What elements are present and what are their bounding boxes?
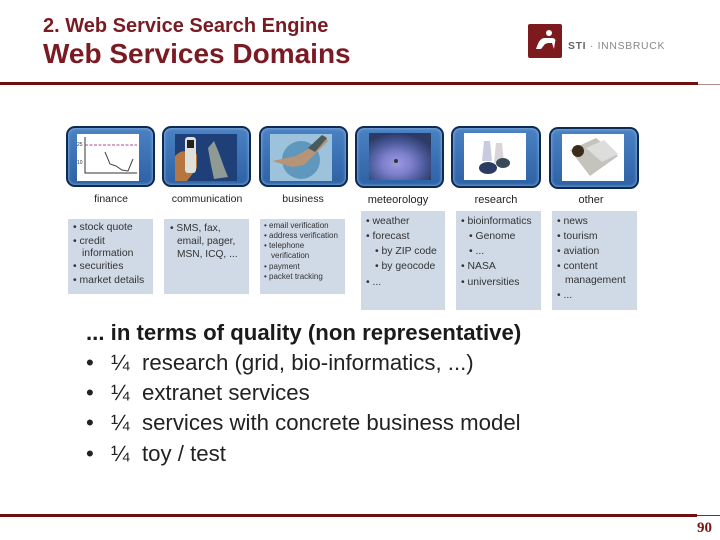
meteorology label: meteorology <box>368 194 428 206</box>
finance card <box>66 126 155 187</box>
other list <box>552 211 637 310</box>
meteorology list: • by ZIP code <box>375 246 437 257</box>
business list: • email verification <box>264 221 329 230</box>
finance list <box>68 219 153 294</box>
quality item: toy: ¼ <box>111 441 130 466</box>
finance chart image: 10 <box>77 160 83 166</box>
panel: business <box>259 126 348 294</box>
meteorology list <box>361 211 445 310</box>
newspapers image <box>562 134 624 181</box>
meteorology list: • ... <box>366 277 381 288</box>
quality item: extranet: • <box>86 380 94 405</box>
communication list: MSN, ICQ, ... <box>177 249 238 260</box>
logo wordmark: STI · INNSBRUCK <box>568 41 665 52</box>
panel: other <box>549 127 639 310</box>
panel: meteorology <box>355 126 445 310</box>
section heading: 2. Web Service Search Engine <box>43 15 328 37</box>
research list: • NASA <box>461 261 496 272</box>
header rule <box>0 82 698 85</box>
business list: • telephone <box>264 241 304 250</box>
footer rule <box>0 514 697 517</box>
quality item: research: • <box>86 350 94 375</box>
quality item: extranet: extranet services <box>142 380 310 405</box>
finance list: information <box>82 248 133 259</box>
quality item: toy <box>86 441 226 466</box>
other list: management <box>565 275 626 286</box>
research list: • Genome <box>469 231 515 242</box>
other list: • aviation <box>557 246 599 257</box>
quality item: business model: • <box>86 410 94 435</box>
business list: • packet tracking <box>264 272 323 281</box>
quality summary list <box>86 320 521 466</box>
communication label: communication <box>172 193 242 205</box>
business list <box>260 219 345 294</box>
quality item: toy: • <box>86 441 94 466</box>
quality item: research: ¼ <box>111 350 130 375</box>
hurricane image <box>369 133 431 180</box>
logo: STI Innsbruck <box>528 24 665 58</box>
meteorology list: • weather <box>366 216 410 227</box>
other label: other <box>578 194 604 206</box>
business label: business <box>282 193 324 205</box>
other list: • tourism <box>557 231 598 242</box>
research list <box>456 211 541 310</box>
research list: • bioinformatics <box>461 216 532 227</box>
finance chart image <box>77 134 139 181</box>
slide title: Web Services Domains <box>43 38 351 69</box>
finance list: • credit <box>73 236 105 247</box>
finance chart image: 25 <box>77 142 83 148</box>
communication list: email, pager, <box>177 236 235 247</box>
quality item: research: research (grid, bio-informatics, ...) <box>142 350 474 375</box>
quality item: toy: toy / test <box>142 441 226 466</box>
meteorology list: • forecast <box>366 231 410 242</box>
finance list: • securities <box>73 261 123 272</box>
meteorology card <box>355 126 444 188</box>
panel: communication <box>162 126 251 294</box>
business list: verification <box>271 251 309 260</box>
research card <box>451 126 541 188</box>
other list: • news <box>557 216 588 227</box>
globe handshake image <box>270 134 332 181</box>
business list: • address verification <box>264 231 338 240</box>
meteorology list: • by geocode <box>375 261 435 272</box>
communication list <box>164 219 249 294</box>
other card <box>549 127 639 189</box>
panel: research <box>451 126 541 310</box>
communication list: • SMS, fax, <box>170 223 221 234</box>
quality item: business model: services with concrete business model <box>142 410 521 435</box>
finance list: • market details <box>73 275 144 286</box>
lab flasks image <box>464 133 526 180</box>
business card <box>259 126 348 187</box>
finance label: finance <box>94 193 128 205</box>
page number: 90 <box>697 520 712 536</box>
list heading: ... in terms of quality (non representative) <box>86 320 521 345</box>
panel: finance <box>66 126 155 294</box>
other list: • ... <box>557 290 572 301</box>
phone image <box>175 134 237 181</box>
research list: • universities <box>461 277 520 288</box>
logo mark <box>528 24 562 58</box>
finance list: • stock quote <box>73 222 133 233</box>
quality item: extranet: ¼ <box>111 380 130 405</box>
business list: • payment <box>264 262 300 271</box>
research list: • ... <box>469 246 484 257</box>
communication card <box>162 126 251 187</box>
quality item: business model: ¼ <box>111 410 130 435</box>
other list: • content <box>557 261 598 272</box>
research label: research <box>475 194 517 206</box>
